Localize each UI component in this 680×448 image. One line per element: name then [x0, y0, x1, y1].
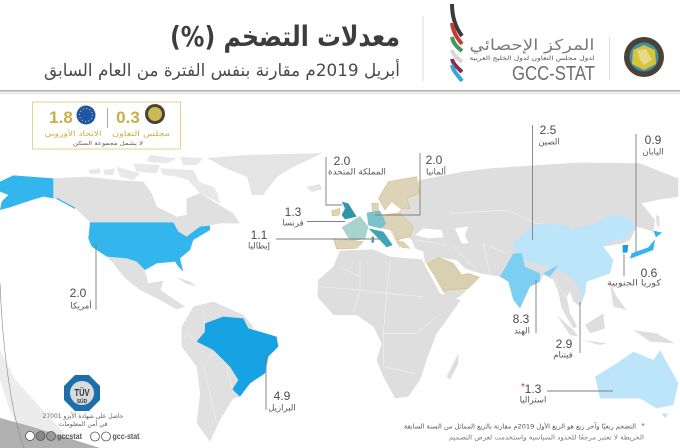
label: italy: إيطاليا [248, 242, 270, 252]
label: usa [70, 286, 92, 312]
label: usa: 2.0 [70, 286, 87, 300]
iceland [306, 184, 322, 192]
subtitle: أبريل 2019م مقارنة بنفس الفترة من العام السابق [44, 59, 400, 81]
label: japan: اليابان [642, 148, 664, 158]
spain and portugal [333, 238, 363, 249]
germany [367, 211, 386, 229]
australia [595, 350, 678, 408]
label: germany [426, 153, 446, 178]
saudi arabia and gulf [427, 258, 479, 292]
world map [0, 153, 678, 448]
label: italy [248, 228, 270, 252]
africa [317, 249, 461, 398]
label: australia: استراليا [520, 396, 546, 406]
canada [53, 177, 240, 237]
leader lines [96, 125, 636, 410]
south america [182, 302, 253, 442]
mexico and central america [107, 257, 185, 309]
africa borders [320, 260, 437, 373]
madagascar [447, 353, 458, 380]
label: france: 1.3 [285, 205, 302, 219]
south korea [623, 245, 628, 253]
label: japan [642, 133, 664, 158]
label: south korea: 0.6 [641, 266, 658, 280]
label: italy: 1.1 [251, 228, 268, 242]
sakhalin [656, 215, 659, 228]
gcc label: مجلس التعاون [112, 129, 170, 138]
social handles [26, 432, 140, 441]
eurasia [390, 163, 678, 328]
yemen and oman [443, 288, 468, 302]
alaska [0, 175, 53, 210]
japan [630, 231, 662, 259]
countries highlighted [0, 175, 278, 397]
label: germany: 2.0 [426, 153, 443, 167]
label: vietnam [553, 337, 573, 360]
label: brazil: 4.9 [274, 389, 291, 403]
united kingdom [342, 202, 357, 219]
greenland [207, 153, 323, 195]
label: vietnam: فيتنام [553, 350, 573, 360]
gcc value: 0.3 [116, 108, 140, 127]
swoosh line [0, 283, 24, 448]
black sea [415, 228, 443, 238]
logo: gcc-stat [452, 4, 595, 85]
label: brazil [268, 389, 296, 414]
label: china: 2.5 [540, 123, 557, 137]
label: france: فرنسا [282, 218, 304, 228]
icon: eu flag circle [76, 106, 96, 124]
gcc-stat wordmark: GCC-STAT [512, 63, 595, 85]
europe [332, 177, 419, 249]
ribbon [452, 4, 462, 81]
africa and eurasia [317, 163, 678, 398]
label: china [538, 123, 560, 148]
caspian sea [455, 227, 468, 243]
italy [368, 228, 393, 247]
asia borders [417, 210, 573, 300]
label: south korea: كوريا الجنوبية [607, 278, 662, 288]
divider [422, 16, 424, 81]
icon: gcc emblem [624, 37, 664, 77]
label: australia: * [521, 382, 525, 393]
label: australia: 1.3 [525, 382, 542, 396]
south america borders [187, 310, 233, 423]
icon: tuv certification badge: TÜV [74, 386, 90, 399]
certification text: في أمن المعلومات [58, 419, 108, 428]
americas and western land [53, 155, 253, 442]
eu value: 1.8 [49, 108, 73, 127]
social handles: gccstat [57, 432, 82, 441]
footnote: الخريطة لا تعتبر مرجعًا للحدود السياسية واستخدمت لغرض التصميم [449, 434, 644, 442]
icon: tuv certification badge [64, 375, 100, 411]
france [342, 216, 368, 241]
social handles: gcc-stat [112, 432, 140, 441]
label: united kingdom [328, 154, 386, 178]
tasmania [662, 413, 668, 418]
organisation subtitle: لدول مجلس التعاون لدول الخليج العربية [470, 55, 595, 62]
label: usa: أمريكا [70, 300, 92, 312]
divider [609, 37, 610, 80]
label: vietnam: 2.9 [556, 337, 573, 351]
label: china: الصين [538, 138, 560, 148]
label: united kingdom: 2.0 [334, 154, 351, 168]
northern europe tan [372, 177, 419, 212]
footnote: * [641, 422, 645, 431]
certification text [43, 411, 124, 428]
vietnam [573, 280, 587, 307]
eastern europe tan [383, 213, 413, 240]
eu label: الاتحاد الأوروبي [44, 128, 102, 138]
india [500, 253, 558, 308]
icon: tuv certification badge: SÜD [77, 398, 88, 405]
organisation name: المركز الإحصائي [470, 36, 594, 55]
label: france [282, 205, 304, 228]
swoosh [0, 350, 77, 448]
header rule [0, 90, 680, 94]
arctic islands [88, 155, 220, 203]
divider [107, 108, 108, 128]
certification text: حاصل على شهادة الأيزو 27001 [43, 411, 124, 420]
icon: gcc emblem small [145, 104, 165, 124]
ireland [332, 208, 340, 216]
label: india: 8.3 [513, 312, 530, 326]
brazil [197, 317, 278, 397]
caribbean [177, 277, 197, 286]
label: united kingdom: المملكة المتحدة [328, 168, 386, 178]
china [512, 215, 635, 282]
population note: لا يشمل مجموعة السكن [73, 140, 143, 147]
title: معدلات التضخم (%) [170, 20, 400, 53]
swoosh dark [0, 418, 100, 448]
label: germany: ألمانيا [426, 166, 446, 178]
footnote [404, 422, 645, 442]
south east asia islands [557, 283, 675, 345]
label: australia [520, 382, 546, 406]
label: japan: 0.9 [645, 133, 662, 147]
label: brazil: البرازيل [268, 404, 296, 414]
greece [397, 242, 410, 248]
label: india: الهند [514, 326, 530, 336]
panel: gcc and eu inflation [32, 102, 180, 149]
usa [88, 222, 210, 272]
alaska panhandle [57, 198, 75, 208]
label: south korea [607, 266, 662, 288]
label: india [513, 312, 530, 336]
footnote: التضخم ربعيًا وآخر ربع هو الربع الأول 2019م مقارنة بالربع المماثل من السنة السابقة [404, 422, 636, 430]
